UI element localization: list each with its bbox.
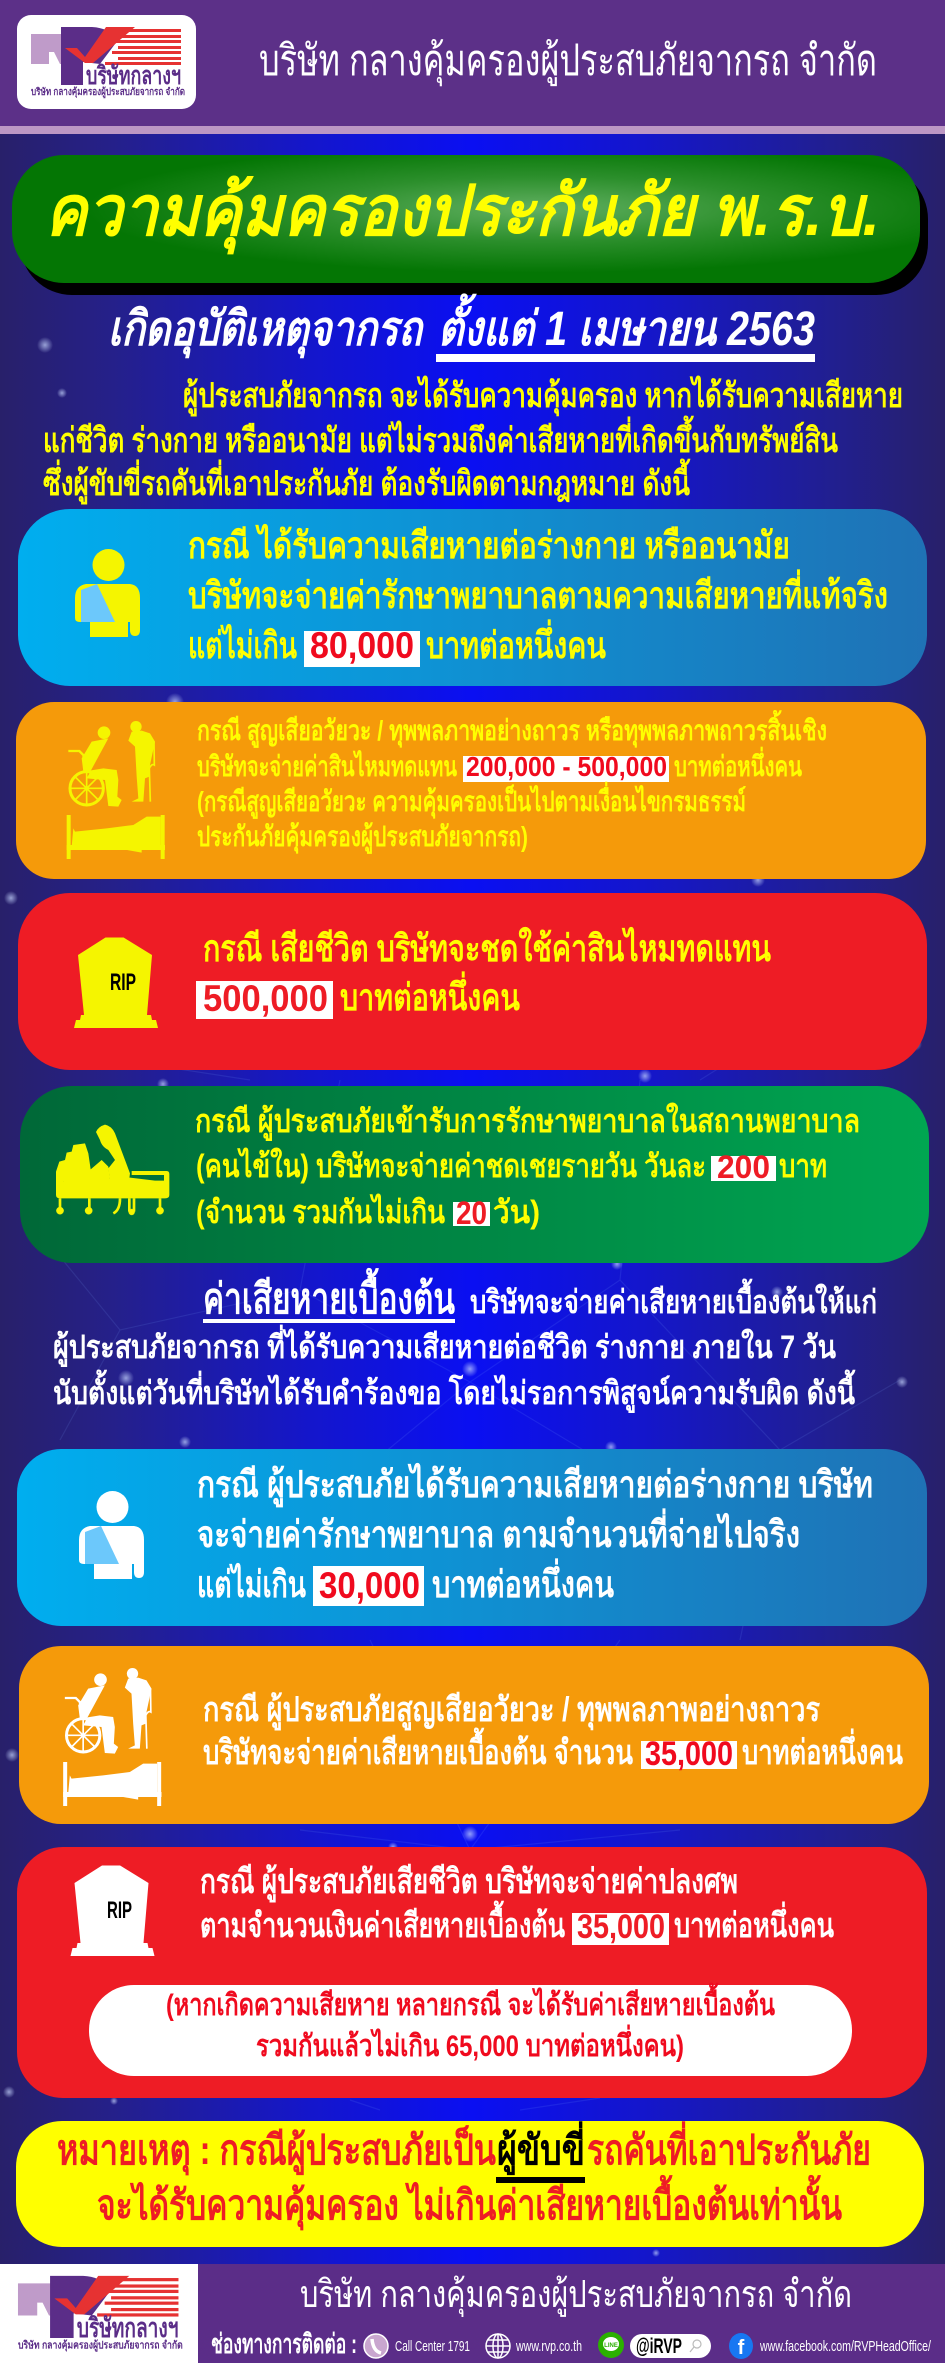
title pill (12, 155, 928, 295)
panel text (188, 523, 888, 667)
panel text: บาทต่อหนึ่งคน (674, 746, 802, 782)
panel text (197, 709, 827, 854)
panel text: บริษัทจะจ่ายค่าสินไหมทดแทน (197, 750, 457, 782)
icon: line (598, 2332, 624, 2358)
panel: bodily injury (18, 509, 927, 686)
panel text: (กรณีสูญเสียอวัยวะ ความคุ้มครองเป็นไปตามเงื่อนไขกรมธรรม์ (197, 781, 746, 819)
header logo: บริษัท กลางคุ้มครองผู้ประสบภัยจากรถ จำกัด (31, 86, 185, 99)
icon: patient and nurse on bed (56, 1125, 169, 1215)
footer logo: บริษัทกลางฯ (77, 2313, 178, 2343)
subtitle: ตั้งแต่ 1 เมษายน 2563 (438, 293, 815, 356)
panel text: บาท (779, 1148, 827, 1184)
panel text: กรณี ได้รับความเสียหายต่อร่างกาย หรืออนามัย (188, 523, 790, 566)
panel: death (18, 893, 927, 1070)
callout: combined limit: รวมกันแล้วไม่เกิน 65,000 บาทต่อหนึ่งคน) (256, 2024, 684, 2063)
note text: รถคันที่เอาประกันภัย (587, 2121, 871, 2173)
panel: hospital stay (20, 1086, 929, 1263)
heading: preliminary compensation: ค่าเสียหายเบื้องต้น (203, 1267, 455, 1322)
footer logo: บริษัท กลางคุ้มครองผู้ประสบภัยจากรถ จำกัด (18, 2339, 183, 2353)
paragraph text (53, 1278, 877, 1414)
panel text: 200,000 - 500,000 (466, 751, 667, 782)
panel text: 200 (717, 1149, 770, 1185)
panel text (197, 1462, 873, 1606)
panel text (203, 1691, 903, 1773)
panel text: 80,000 (310, 625, 414, 666)
callout: combined limit: (หากเกิดความเสียหาย หลายกรณี จะได้รับค่าเสียหายเบื้องต้น (166, 1982, 775, 2022)
panel text: บริษัทจะจ่ายค่าเสียหายเบื้องต้น จำนวน (203, 1727, 633, 1772)
note text: หมายเหตุ : กรณีผู้ประสบภัยเป็น (57, 2125, 496, 2176)
panel text: บาทต่อหนึ่งคน (340, 971, 520, 1018)
icon: facebook: f (738, 2337, 745, 2359)
panel: preliminary death (17, 1847, 927, 2098)
footer logo (18, 2276, 183, 2353)
footer (0, 2264, 945, 2363)
intro paragraph: ซึ่งผู้ขับขี่รถคันที่เอาประกันภัย ต้องรับผิดตามกฎหมาย ดังนี้ (43, 458, 691, 505)
icon: tombstone: RIP (110, 969, 136, 996)
panel text: จะจ่ายค่ารักษาพยาบาล ตามจำนวนที่จ่ายไปจริง (197, 1508, 800, 1555)
panel text: ประกันภัยคุ้มครองผู้ประสบภัยจากรถ) (197, 821, 528, 854)
icon: tombstone (70, 1866, 154, 1956)
line id pill: @iRVP (636, 2335, 682, 2358)
icon: injured person (75, 549, 140, 637)
intro paragraph (43, 375, 903, 505)
icon: tombstone (74, 938, 158, 1028)
contact label: ช่องทางการติดต่อ : (211, 2329, 357, 2359)
note text (57, 2121, 871, 2231)
icon: facebook (729, 2333, 753, 2359)
note text: ผู้ขับขี่ (497, 2121, 585, 2176)
contact row (211, 2329, 932, 2359)
panel text (200, 1863, 834, 1946)
icon: wheelchair, amputee and bed (63, 1668, 161, 1806)
panel text (196, 926, 771, 1019)
header band (0, 0, 945, 134)
website: www.rvp.co.th (515, 2338, 582, 2355)
panel: preliminary disability (19, 1646, 929, 1824)
panel text: 30,000 (319, 1565, 420, 1606)
preliminary compensation paragraph (53, 1267, 877, 1414)
heading: preliminary compensation (203, 1267, 455, 1323)
icon: phone (364, 2334, 388, 2358)
icon: wheelchair, amputee and bed (67, 721, 165, 859)
call center: Call Center 1791 (395, 2338, 470, 2355)
panel text: (คนไข้ใน) บริษัทจะจ่ายค่าชดเชยรายวัน วันละ (196, 1147, 706, 1184)
subtitle: เกิดอุบัติเหตุจากรถ (108, 303, 424, 359)
panel text: กรณี เสียชีวิต บริษัทจะชดใช้ค่าสินไหมทดแทน (203, 926, 771, 969)
callout: combined limit (89, 1982, 852, 2076)
panel text: แต่ไม่เกิน (197, 1562, 306, 1605)
panel text: (จำนวน รวมกันไม่เกิน (196, 1193, 445, 1230)
panel: permanent disability (16, 702, 926, 879)
header logo (17, 15, 196, 109)
panel text: 35,000 (577, 1908, 665, 1946)
panel text (195, 1102, 860, 1231)
icon: globe (486, 2334, 510, 2358)
panel text: บาทต่อหนึ่งคน (674, 1901, 834, 1945)
panel text: 500,000 (203, 978, 328, 1019)
panel: preliminary injury (17, 1449, 927, 1626)
panel text: กรณี ผู้ประสบภัยเสียชีวิต บริษัทจะจ่ายค่าปลงศพ (200, 1863, 738, 1903)
icon: tombstone: RIP (107, 1897, 132, 1924)
panel text: บาทต่อหนึ่งคน (432, 1558, 614, 1605)
icon: injured person (79, 1491, 144, 1579)
panel text: วัน) (493, 1194, 540, 1230)
panel text: บาทต่อหนึ่งคน (426, 619, 606, 666)
panel text: 35,000 (645, 1735, 733, 1773)
panel text: 20 (456, 1195, 487, 1231)
panel text: แต่ไม่เกิน (188, 623, 297, 666)
header logo: บริษัทกลางฯ (86, 62, 181, 90)
subtitle (108, 293, 815, 362)
note panel (16, 2121, 924, 2247)
icon: line: LINE (604, 2343, 618, 2349)
panel text: ตามจำนวนเงินค่าเสียหายเบื้องต้น (200, 1900, 565, 1945)
